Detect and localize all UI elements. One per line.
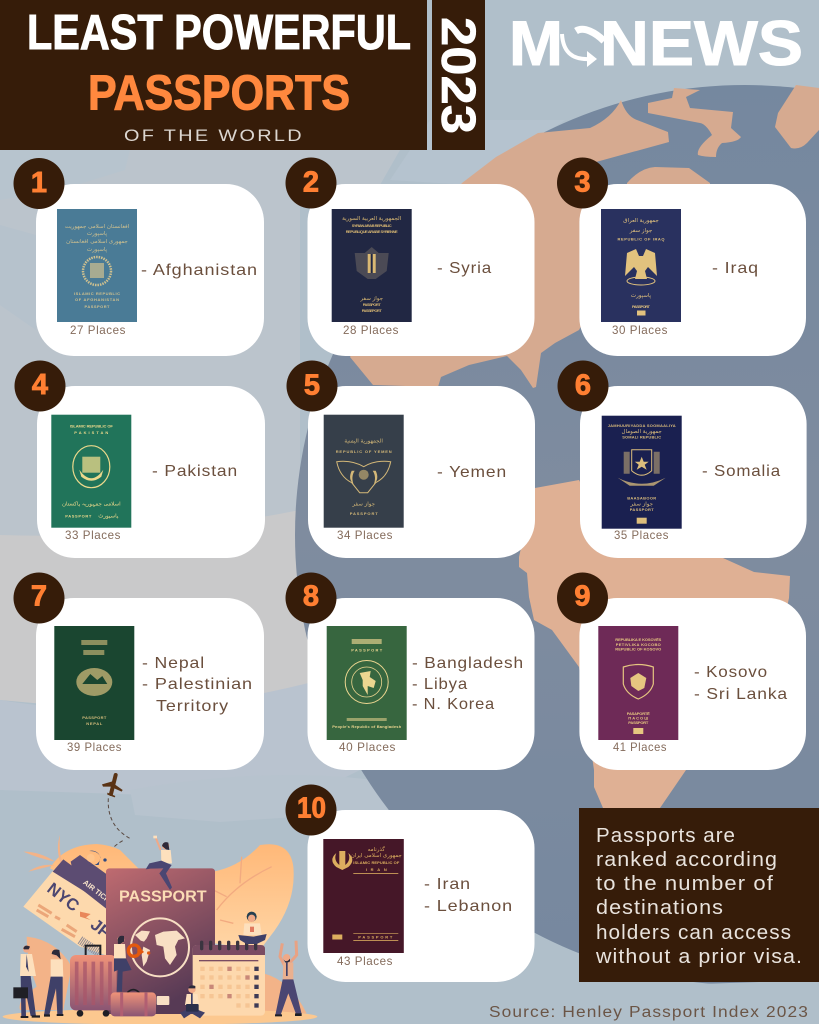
country names [694, 664, 788, 703]
passport: Pakistan [51, 415, 131, 528]
rank badge 10: 10 [297, 792, 326, 824]
country name: - Yemen [437, 464, 507, 481]
country name: - Iraq [712, 260, 759, 277]
globe: ocean and continents [295, 85, 819, 1024]
travel bag [111, 990, 156, 1016]
passport: Yemen: PASSPORT [350, 511, 378, 516]
places: 40: 40 Places [339, 740, 396, 754]
person: woman sitting on passport [146, 836, 172, 890]
passport: Afghanistan: جمهوری اسلامی افغانستان [66, 239, 128, 245]
tickets: JF [87, 915, 114, 942]
passport: Iraq: پاسپورت [631, 293, 652, 299]
rank badge 1 [14, 158, 64, 209]
card 2: Syria [286, 158, 534, 356]
passport: Iran: گذرنامه [368, 846, 385, 853]
person: woman on passport side [114, 936, 132, 992]
places: 39: 39 Places [67, 740, 122, 754]
passport: Pakistan: PAKISTAN [74, 430, 108, 435]
suitcase [70, 946, 117, 1017]
country names: - Iran [424, 876, 471, 893]
passport: Kosovo: REPUBLIKA E KOSOVËS [615, 637, 662, 642]
places: 35: 35 Places [614, 528, 669, 542]
tickets [23, 855, 114, 957]
passport: Iran: PASSPORT [358, 934, 393, 940]
calendar [193, 942, 265, 1016]
rank badge 6 [558, 360, 608, 412]
logo: MS News: M [509, 9, 563, 79]
passport: Syria: PASSPORT [363, 302, 381, 307]
card 8: Bangladesh, Libya, N. Korea [286, 572, 534, 770]
rank badge 8 [286, 572, 336, 624]
passport: Bangladesh [327, 626, 407, 740]
passport: Iran: ISLAMIC REPUBLIC OF [353, 860, 400, 865]
country names: - Libya [412, 676, 468, 693]
passport: Yemen [324, 415, 404, 528]
rank badge 5 [286, 360, 338, 412]
passport: Pakistan: پاسپورٹ [98, 514, 119, 520]
passport: Kosovo: PETIVLIKA KOCOBO [616, 642, 661, 647]
passport: Iran [323, 839, 404, 953]
passport: Kosovo: ПАСОШ [628, 716, 648, 720]
continent: lower land mass [519, 480, 790, 808]
passport: Nepal [54, 626, 134, 740]
places: 27: 27 Places [70, 323, 126, 337]
card 7: Nepal and Palestinian Territory [14, 572, 264, 770]
country names: - Palestinian [142, 676, 253, 693]
passport: Afghanistan: ISLAMIC REPUBLIC [74, 291, 120, 296]
rank badge 4: 4 [32, 369, 48, 401]
note panel: ranking explanation: holders can access [596, 922, 792, 944]
passport: Kosovo: PASSPORT [628, 720, 649, 725]
passport: Nepal: NEPAL [86, 721, 103, 726]
note panel: ranking explanation [579, 808, 819, 982]
passport: Afghanistan: پاسپورت [87, 231, 108, 237]
places: 33: 33 Places [65, 528, 121, 542]
rank badge 9 [557, 572, 608, 624]
passport: Nepal: PASSPORT [82, 715, 107, 720]
rank badge 4 [14, 360, 66, 412]
rank badge 7 [14, 572, 64, 624]
rank badge 5: 5 [304, 370, 320, 402]
passport: Syria: REPUBLIQUE ARABE SYRIENNE [346, 229, 398, 234]
passport: Somalia: جمهورية الصومال [622, 429, 662, 435]
continent: top peninsula [648, 88, 741, 157]
flight path [98, 798, 135, 947]
icon: airplane [102, 775, 123, 797]
note panel: ranking explanation: ranked according [596, 849, 778, 871]
passport: Somalia: جواز سفر [629, 502, 653, 508]
country names: - Bangladesh [412, 655, 524, 672]
country names [142, 655, 253, 715]
person: woman sitting on calendar [238, 912, 267, 944]
card 9: Kosovo and Sri Lanka [557, 572, 806, 770]
passport: Iran: IRAN [366, 867, 387, 872]
country names: - Kosovo [694, 664, 768, 681]
passport: Somalia: BAASABOOR [627, 496, 656, 501]
passport: Afghanistan: PASSPORT [84, 304, 110, 309]
passport: Syria: جواز سفر [359, 296, 383, 302]
card 10: Iran and Lebanon [286, 784, 534, 982]
background blobs [50, 844, 294, 950]
card 1: Afghanistan [14, 158, 264, 356]
tickets: NYC [44, 879, 83, 915]
country name: - Somalia [702, 463, 781, 480]
passport: Kosovo [598, 626, 678, 740]
rank badge 2 [286, 158, 336, 208]
country names [424, 876, 513, 915]
leaves [20, 835, 307, 1013]
passport: Somalia: PASSPORT [630, 507, 654, 512]
places: 28: 28 Places [343, 323, 399, 337]
passport: Bangladesh: People's Republic of Bangladesh [332, 724, 402, 729]
logo: MS News: NEWS [600, 9, 803, 79]
passport: Afghanistan [57, 209, 137, 322]
source line: Source: Henley Passport Index 2023 [489, 1004, 809, 1021]
person: woman with crossed arms [44, 949, 63, 1017]
note panel: ranking explanation: destinations [596, 897, 724, 919]
places: 34: 34 Places [337, 528, 393, 542]
title line: least powerful: LEAST POWERFUL [27, 6, 411, 60]
passport: Pakistan: ISLAMIC REPUBLIC OF [70, 424, 113, 429]
country names [412, 655, 524, 713]
rank badge 3: 3 [574, 166, 591, 198]
passport: Somalia: SOMALI REPUBLIC [622, 435, 661, 440]
passport: Kosovo: REPUBLIC OF KOSOVO [615, 646, 661, 652]
person: man with briefcase [13, 945, 40, 1018]
sky band crossing the globe bottom [470, 933, 819, 1024]
country names: Territory [156, 698, 229, 715]
note panel: ranking explanation: to the number of [596, 873, 774, 895]
location pin orange [128, 945, 150, 957]
continent: top right [775, 85, 819, 148]
places: 30: 30 Places [612, 323, 668, 337]
rank badge 9: 9 [574, 580, 591, 612]
passport: Yemen: الجمهورية اليمنية [344, 439, 383, 445]
country name: - Pakistan [152, 463, 238, 480]
logo: MS News [509, 9, 803, 79]
places: 43: 43 Places [337, 954, 393, 968]
passport: Iraq: REPUBLIC OF IRAQ [618, 236, 664, 242]
passport: Somalia: JAMHUURIYADDA SOOMAALIYA [608, 423, 676, 428]
country name: - Syria [437, 260, 492, 277]
passport: Iraq: جمهورية العراق [623, 218, 659, 224]
card 4: Pakistan [14, 360, 265, 558]
passport: Syria: الجمهورية العربية السورية [342, 216, 402, 222]
passport: Iraq: جواز سفر [629, 228, 652, 234]
passport: Syria: SYRIAN ARAB REPUBLIC [352, 223, 392, 228]
passport: Pakistan: PASSPORT [65, 514, 92, 519]
card 3: Iraq [557, 158, 806, 356]
header: title block [0, 0, 427, 150]
title line: of the world: OF THE WORLD [124, 126, 304, 145]
ground [3, 1009, 317, 1024]
rank badge 2: 2 [303, 166, 319, 198]
passport: Bangladesh: PASSPORT [351, 648, 383, 652]
country names: - Nepal [142, 655, 205, 672]
passport: Iraq [601, 209, 681, 322]
country names: - Sri Lanka [694, 686, 788, 703]
country name: - Afghanistan [141, 262, 258, 279]
continent: dome above card 3 [627, 167, 710, 260]
passport: Yemen: REPUBLIC OF YEMEN [336, 449, 392, 454]
rank badge 8: 8 [303, 580, 319, 612]
person: man cheering [275, 941, 302, 1016]
giant passport cover [106, 868, 215, 1014]
title line: passports: PASSPORTS [88, 66, 350, 120]
icon: location pin blue [87, 851, 107, 865]
passport: Iran: جمهوری اسلامی ایران [351, 853, 402, 859]
passport: Afghanistan: OF AFGHANISTAN [75, 297, 119, 302]
passport: Yemen: جواز سفر [351, 502, 375, 508]
person: man with laptop [180, 985, 205, 1018]
giant passport cover: PASSPORT [119, 889, 207, 906]
passport: Afghanistan: افغانستان اسلامی جمهوریت [65, 224, 130, 230]
rank badge 10 [286, 784, 336, 836]
places: 41: 41 Places [613, 740, 667, 754]
tickets: AIR TICK [81, 878, 113, 905]
continent: upper land mass [350, 100, 669, 388]
passport: Syria [332, 209, 412, 322]
year banner: 2023 [431, 17, 484, 134]
passport: Iraq: PASSPORT [632, 304, 651, 309]
card 6: Somalia [558, 360, 807, 558]
year banner [431, 0, 485, 150]
passport: Syria: PASSEPORT [362, 308, 382, 313]
rank badge 7: 7 [31, 580, 47, 612]
passport: Somalia [602, 416, 682, 529]
passport: Pakistan: اسلامی جمہوریہ پاکستان [62, 501, 121, 508]
country names: - N. Korea [412, 696, 495, 713]
card 5: Yemen [286, 360, 535, 558]
rank badge 1: 1 [31, 167, 47, 199]
illustration: travellers with giant passport [3, 775, 317, 1024]
passport: Kosovo: PASAPORTË [627, 711, 650, 716]
rank badge 3 [557, 158, 608, 208]
note panel: ranking explanation: Passports are [596, 825, 736, 847]
passport: Afghanistan: پاسپورت [87, 247, 108, 253]
rank badge 6: 6 [575, 370, 591, 402]
country names: - Lebanon [424, 898, 513, 915]
note panel: ranking explanation: without a prior visa. [595, 946, 803, 968]
